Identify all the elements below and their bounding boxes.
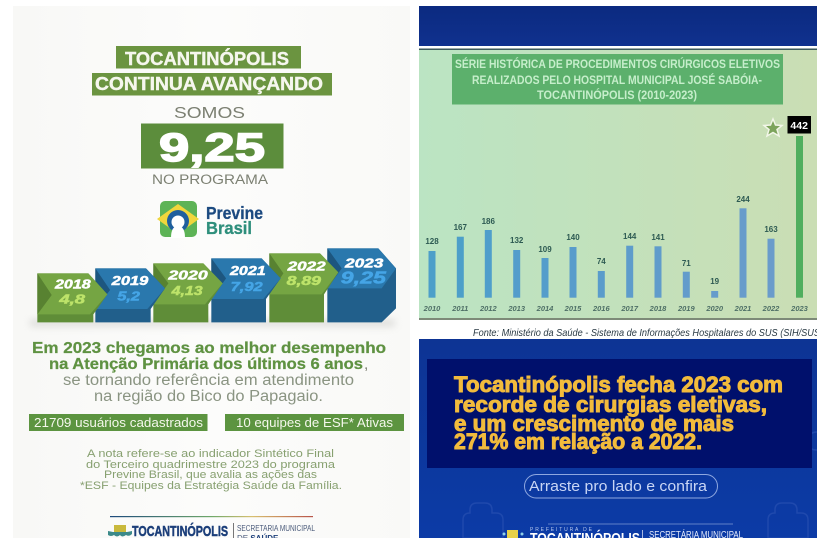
arrow 2021: 7,92: [231, 280, 263, 294]
text: somos: SOMOS: [174, 105, 245, 122]
headline box: recorde de cirurgias eletivas,: [454, 392, 767, 417]
arrow 2019: 2019: [110, 274, 148, 288]
bar chart: surgeries per year: 2013: [507, 304, 526, 313]
title: Tocantinópolis continua avançando: [92, 46, 332, 96]
text: explanatory note: do Terceiro quadrimestre 2023 do programa: [86, 459, 336, 471]
arrow 2019: [95, 268, 165, 322]
arrow 2018: 2018: [54, 277, 92, 291]
logo: Prefeitura de Tocantinópolis: [502, 524, 743, 538]
arrow 2023: 2023: [344, 257, 383, 271]
bar chart: surgeries per year: 74: [597, 257, 606, 266]
arrow 2023: [327, 248, 396, 322]
arrow 2022: 2022: [286, 260, 326, 274]
headline box: [427, 359, 812, 468]
score box: 9,25: 9,25: [159, 126, 265, 170]
bar chart: surgeries per year: 71: [682, 259, 691, 268]
logo: Prefeitura de Tocantinópolis: PREFEITURA DE: [530, 527, 593, 533]
bar chart: surgeries per year: 167: [454, 223, 468, 232]
chart title: TOCANTINÓPOLIS (2010-2023): [537, 87, 697, 102]
badge: registered users: 21709 usuários cadastrados: [34, 415, 204, 430]
chart title: [452, 54, 783, 104]
logo: Previne Brasil: Brasil: [206, 218, 252, 238]
headline box: 271% em relação a 2022.: [454, 429, 702, 454]
bar chart: surgeries per year: 2016: [592, 304, 610, 313]
bar chart: surgeries per year: 244: [736, 195, 750, 204]
title: Tocantinópolis continua avançando: CONTINUA AVANÇANDO: [95, 74, 323, 94]
bar chart: surgeries per year: 128: [425, 237, 439, 246]
text: performance statement: ,: [364, 356, 368, 373]
value label: 442: 442: [790, 120, 808, 132]
bar chart: surgeries per year: 132: [510, 236, 524, 245]
arrow 2020: 2020: [167, 268, 208, 282]
title: Tocantinópolis continua avançando: TOCANTINÓPOLIS: [125, 48, 289, 69]
bar chart: surgeries per year: 2018: [649, 304, 667, 313]
bar chart: surgeries per year: 163: [764, 225, 778, 234]
chart title: REALIZADOS PELO HOSPITAL MUNICIPAL JOSÉ SABÓIA-: [472, 72, 762, 87]
bar chart: surgeries per year: 19: [710, 277, 720, 286]
arrow 2021: 2021: [229, 264, 266, 278]
arrow 2023: 9,25: [341, 268, 387, 288]
bar chart: surgeries per year: 2014: [536, 304, 554, 313]
bar chart: surgeries per year: 2021: [734, 304, 751, 313]
text: explanatory note: Previne Brasil, que avalia as ações das: [104, 469, 318, 481]
text: performance statement: se tornando referência em atendimento: [63, 372, 354, 389]
bar chart: surgeries per year: 140: [566, 233, 580, 242]
bar chart: surgeries per year: 2012: [479, 304, 497, 313]
bar chart: surgeries per year: 2019: [677, 304, 695, 313]
arrow 2018: [37, 273, 107, 322]
bar chart: surgeries per year: 2022: [762, 304, 780, 313]
panel: Previne Brasil performance: [13, 6, 410, 538]
bar chart: surgeries per year: 144: [623, 232, 637, 241]
arrow 2022: [269, 253, 338, 322]
bar chart: surgeries per year: 2020: [705, 304, 724, 313]
text: performance statement: na região do Bico do Papagaio.: [94, 388, 323, 405]
text: performance statement: [32, 340, 386, 405]
bar chart: surgeries per year: 186: [482, 217, 496, 226]
logo: Previne Brasil: Previne: [206, 203, 263, 223]
white mask at right edge: [817, 325, 828, 339]
panel: blue header band: [419, 6, 817, 46]
arrow 2019: 5,2: [117, 290, 140, 304]
text: performance statement: na Atenção Primária dos últimos 6 anos: [49, 356, 363, 373]
bar chart: surgeries per year: 2023: [790, 304, 809, 313]
bar chart: surgeries per year: 2017: [620, 304, 639, 313]
button: swipe prompt: [524, 474, 718, 498]
value label: 442: [788, 116, 811, 134]
score box: 9,25: [141, 124, 284, 170]
bar chart: surgeries per year: 109: [538, 245, 552, 254]
bar chart: surgeries per year: 2011: [451, 304, 468, 313]
arrow 2018: 4,8: [58, 292, 86, 306]
arrow 2022: 8,89: [287, 274, 321, 288]
arrow 2021: [211, 258, 281, 322]
text: explanatory note: *ESF - Equipes da Estratégia Saúde da Família.: [80, 480, 342, 492]
logo: Tocantinópolis municipal health secretariat: [108, 516, 315, 538]
panel: surgery chart: [419, 48, 817, 320]
headline box: e um crescimento de mais: [454, 411, 734, 436]
text: explanatory note: [80, 448, 342, 492]
chart title: SÉRIE HISTÓRICA DE PROCEDIMENTOS CIRÚRGICOS ELETIVOS: [455, 56, 780, 71]
bar chart: surgeries per year: [423, 136, 809, 313]
text: performance statement: Em 2023 chegamos ao melhor desempenho: [32, 340, 386, 357]
panel: record headline: [419, 339, 817, 538]
bar chart: surgeries per year: 2010: [423, 304, 441, 313]
chart: yearly scores as rising arrows: [30, 248, 396, 326]
arrow 2020: 4,13: [170, 284, 203, 298]
text: explanatory note: A nota refere-se ao indicador Sintético Final: [87, 448, 334, 460]
arrow 2020: [153, 263, 223, 322]
logo: Previne Brasil: [157, 201, 263, 238]
decorative cross outlines: [463, 432, 817, 538]
icon: star: [764, 119, 782, 136]
button: swipe prompt: Arraste pro lado e confira: [529, 478, 708, 495]
logo: Tocantinópolis municipal health secretariat: SECRETARIA MUNICIPAL: [237, 524, 315, 533]
text: no programa: NO PROGRAMA: [152, 172, 268, 187]
headline box: Tocantinópolis fecha 2023 com: [454, 372, 783, 397]
bar chart: surgeries per year: 2015: [564, 304, 582, 313]
bar chart: surgeries per year: 141: [651, 233, 665, 242]
badge: active teams: 10 equipes de ESF* Ativas: [236, 415, 394, 430]
